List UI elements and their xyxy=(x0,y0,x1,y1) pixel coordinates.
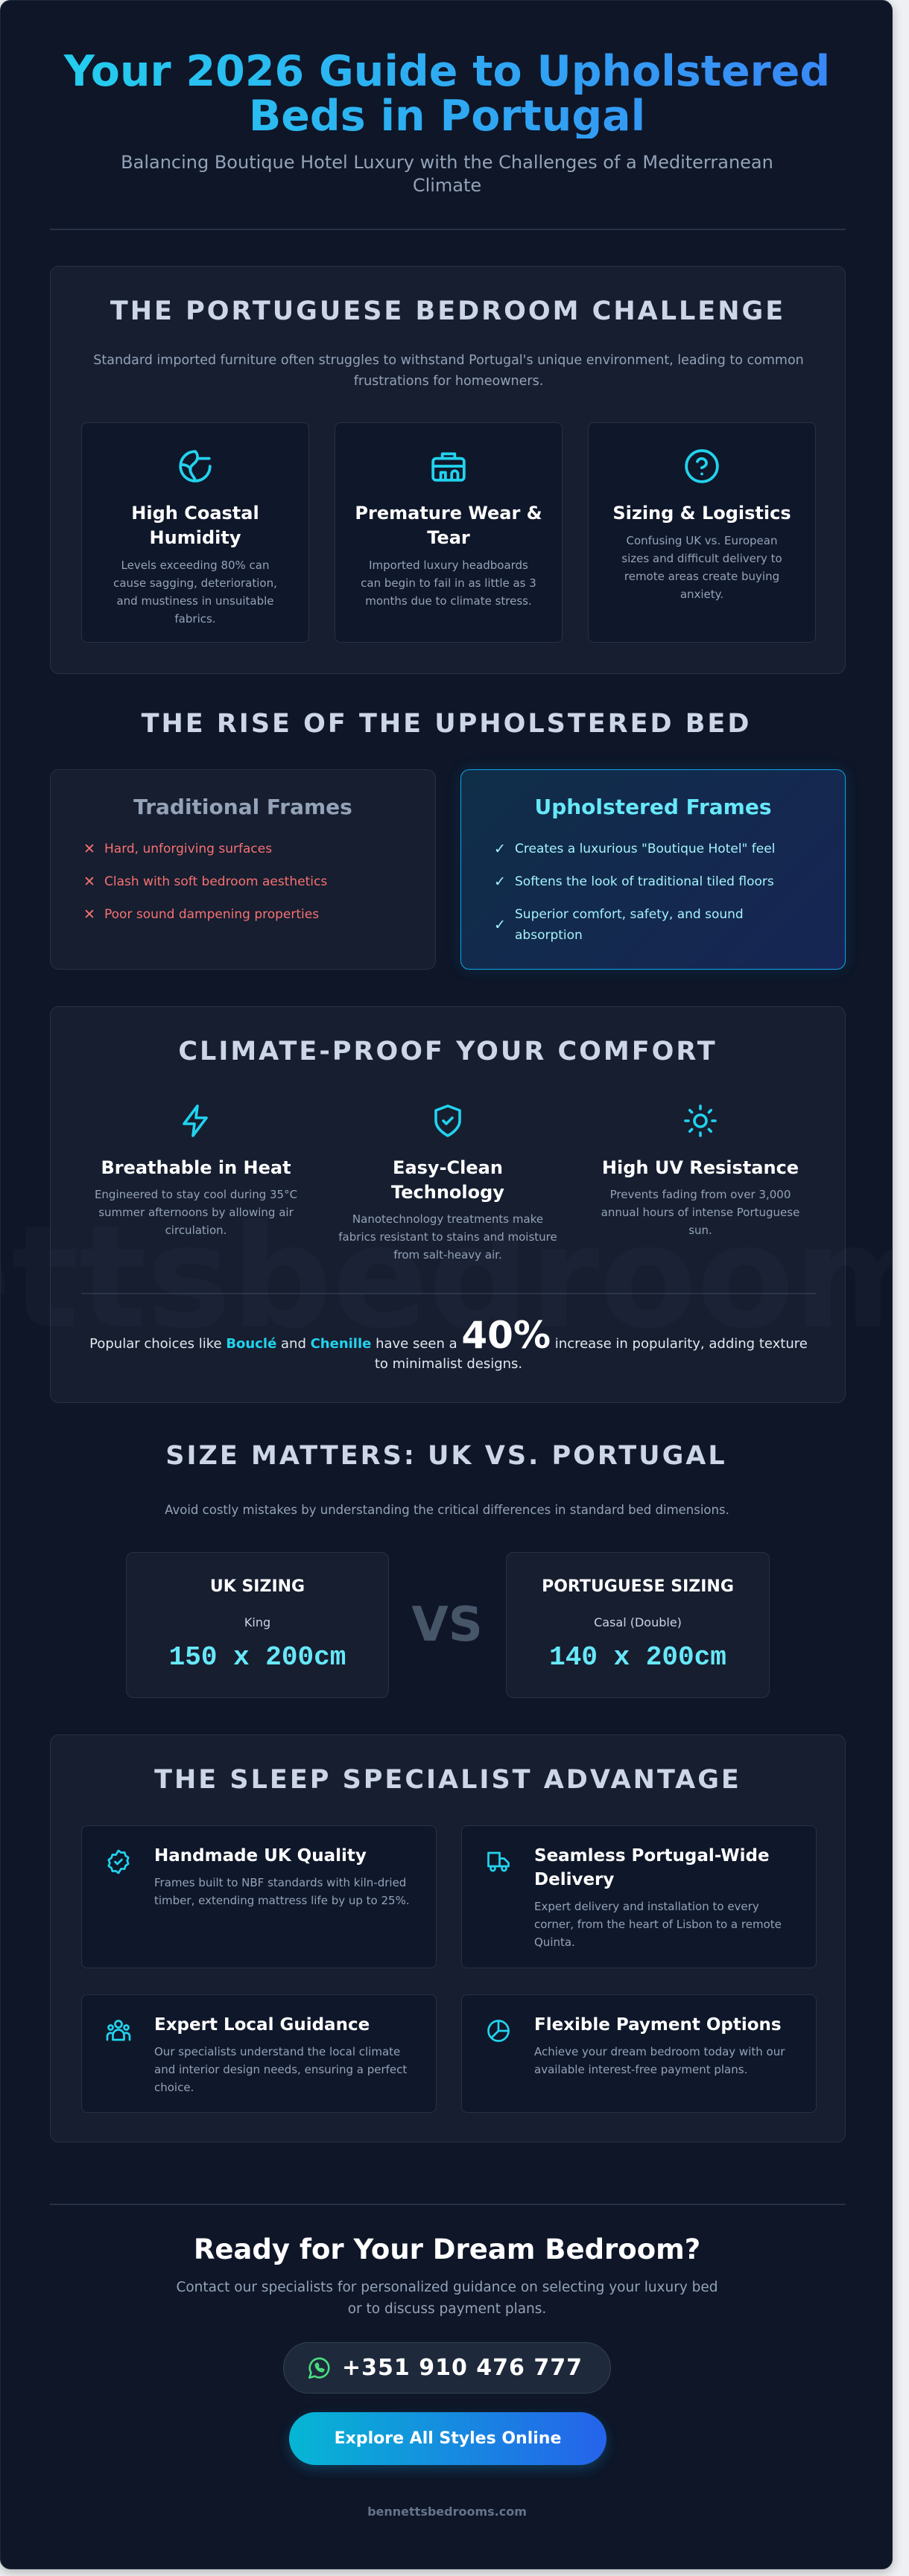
heading: rise of upholstered bed: THE RISE OF THE UPHOLSTERED BED xyxy=(142,709,751,739)
footer url: bennettsbedrooms.com xyxy=(367,2505,527,2519)
box: uk sizing: 150 x 200cm xyxy=(169,1642,346,1673)
icon: question xyxy=(685,449,719,483)
feature: breathable: Breathable in Heat xyxy=(101,1157,291,1178)
card: local guidance: Expert Local Guidance xyxy=(154,2015,370,2035)
panel: sleep specialist advantage xyxy=(50,1734,846,2143)
card: sizing: Sizing & Logistics xyxy=(612,503,791,524)
icon: globe xyxy=(179,450,212,483)
box: uk sizing: UK SIZING xyxy=(210,1577,305,1596)
card: sizing: Confusing UK vs. European sizes and difficult delivery to remote areas create buying anxiety. xyxy=(621,534,782,601)
panel: upholstered frames: ✓ xyxy=(494,874,506,890)
card: wear and tear: Premature Wear & Tear xyxy=(355,503,542,548)
title xyxy=(1,49,893,139)
feature: easy clean: Nanotechnology treatments make fabrics resistant to stains and moisture from salt-heavy air. xyxy=(338,1212,557,1262)
card: humidity xyxy=(81,422,309,643)
card: handmade: Frames built to NBF standards with kiln-dried timber, extending mattress life by up to 25%. xyxy=(154,1876,410,1907)
box: uk sizing xyxy=(126,1552,389,1698)
feature: breathable: Engineered to stay cool during 35°C summer afternoons by allowing air circulation. xyxy=(95,1188,297,1237)
box: portuguese sizing xyxy=(506,1552,770,1698)
panel: traditional frames: Hard, unforgiving surfaces xyxy=(104,842,272,856)
intro text: Standard imported furniture often struggles to withstand Portugal's unique environment, leading to common frustrations for homeowners. xyxy=(93,353,804,389)
card: handmade: Handmade UK Quality xyxy=(154,1846,367,1866)
panel: traditional frames xyxy=(50,769,436,970)
vs label: VS xyxy=(411,1597,483,1653)
title: Your 2026 Guide to Upholstered xyxy=(64,47,830,96)
card: delivery: Seamless Portugal-Wide Delivery xyxy=(534,1846,770,1889)
card: local guidance: Our specialists understand the local climate and interior design needs, ensuring a perfect choice. xyxy=(154,2045,407,2094)
feature: uv xyxy=(601,1104,799,1237)
panel: upholstered frames: ✓ xyxy=(494,917,506,933)
button: explore xyxy=(289,2412,606,2465)
card: local guidance xyxy=(81,1994,437,2113)
heading: size matters: SIZE MATTERS: UK VS. PORTUGAL xyxy=(165,1441,727,1471)
panel: climate-proof xyxy=(50,1006,846,1403)
card: handmade xyxy=(81,1825,437,1968)
size intro: Avoid costly mistakes by understanding the critical differences in standard bed dimensions. xyxy=(165,1503,729,1517)
card: payment: Flexible Payment Options xyxy=(534,2015,782,2035)
cta heading: Ready for Your Dream Bedroom? xyxy=(194,2233,700,2265)
panel: traditional frames: ✕ xyxy=(83,906,95,923)
panel: upholstered frames: Creates a luxurious "Boutique Hotel" feel xyxy=(515,842,775,856)
panel: upholstered frames: Upholstered Frames xyxy=(534,795,772,819)
card: humidity: Levels exceeding 80% can cause sagging, deterioration, and mustiness in unsuitable fabrics. xyxy=(113,559,277,626)
cta text: Contact our specialists for personalized guidance on selecting your luxury bed or to discuss payment plans. xyxy=(176,2280,718,2317)
stat callout: 40%: Popular choices like Bouclé and Chenille have seen a 40% increase in popularity, adding texture to minimalist designs. xyxy=(89,1314,808,1372)
panel: traditional frames: Clash with soft bedroom aesthetics xyxy=(104,874,327,889)
card: sizing xyxy=(588,422,816,643)
feature: breathable xyxy=(95,1104,297,1237)
feature: easy clean xyxy=(338,1104,557,1262)
panel: traditional frames: ✕ xyxy=(83,874,95,890)
card: delivery: Expert delivery and installation to every corner, from the heart of Lisbon to a remote Quinta. xyxy=(534,1900,782,1949)
panel: traditional frames: Poor sound dampening properties xyxy=(104,907,319,922)
icon: toolbox xyxy=(431,453,466,482)
feature: uv: Prevents fading from over 3,000 annual hours of intense Portuguese sun. xyxy=(601,1188,799,1237)
box: portuguese sizing: Casal (Double) xyxy=(594,1615,682,1629)
panel: upholstered frames xyxy=(460,769,846,970)
panel: upholstered frames: ✓ xyxy=(494,841,506,857)
card: payment xyxy=(461,1994,817,2113)
card: humidity: High Coastal Humidity xyxy=(131,503,259,548)
feature: uv: High UV Resistance xyxy=(602,1157,799,1178)
card: wear and tear: Imported luxury headboards can begin to fail in as little as 3 months due to climate stress. xyxy=(361,559,536,608)
subtitle: Balancing Boutique Hotel Luxury with the Challenges of a Mediterranean Climate xyxy=(121,152,773,196)
icon: whatsapp xyxy=(308,2358,330,2379)
feature: easy clean: Easy-Clean Technology xyxy=(391,1157,504,1203)
button: explore: Explore All Styles Online xyxy=(335,2429,561,2448)
heading: advantage: THE SLEEP SPECIALIST ADVANTAGE xyxy=(154,1765,741,1795)
phone pill: +351 910 476 777 xyxy=(342,2355,583,2381)
panel: traditional frames: Traditional Frames xyxy=(133,795,352,819)
heading: challenge: THE PORTUGUESE BEDROOM CHALLENGE xyxy=(110,296,785,326)
box: uk sizing: King xyxy=(244,1615,270,1629)
panel: upholstered frames: Softens the look of traditional tiled floors xyxy=(515,874,774,889)
card: payment: Achieve your dream bedroom today with our available interest-free payment plans. xyxy=(534,2045,785,2076)
panel: portuguese bedroom challenge xyxy=(50,266,846,674)
title: Beds in Portugal xyxy=(249,92,645,141)
card: delivery xyxy=(461,1825,817,1968)
heading: climate: CLIMATE-PROOF YOUR COMFORT xyxy=(178,1037,718,1066)
box: portuguese sizing: 140 x 200cm xyxy=(549,1642,726,1673)
panel: traditional frames: ✕ xyxy=(83,841,95,857)
panel: upholstered frames: Superior comfort, safety, and sound absorption xyxy=(515,907,744,943)
phone pill xyxy=(283,2342,611,2394)
box: portuguese sizing: PORTUGUESE SIZING xyxy=(542,1577,734,1596)
card: wear and tear xyxy=(335,422,563,643)
